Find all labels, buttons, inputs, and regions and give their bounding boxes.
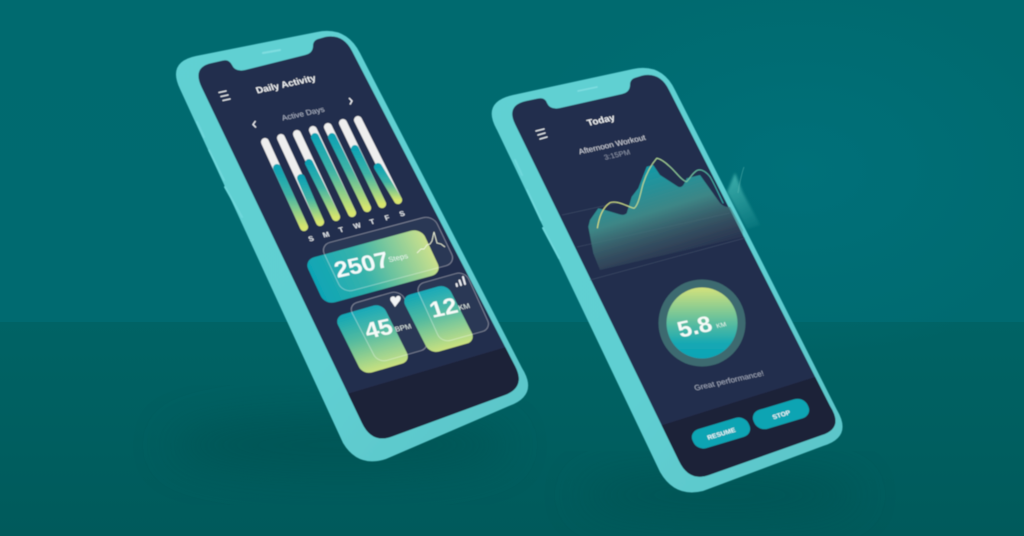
distance card outline (415, 271, 491, 343)
day labels: W (352, 221, 363, 231)
phone 2 bottom band (662, 377, 836, 477)
button: resume: RESUME (706, 427, 737, 442)
steps value: 2507 (331, 248, 393, 283)
button: resume (689, 415, 753, 451)
subtitle: Afternoon Workout: Afternoon Workout (577, 133, 648, 156)
title: Today: Today (585, 113, 617, 129)
heart rate card outline (348, 290, 430, 363)
chart overflow ghost (727, 173, 760, 229)
steps unit: Steps (387, 252, 410, 264)
chart area (588, 165, 743, 270)
title: Daily Activity: Daily Activity (254, 73, 318, 96)
distance card fill (401, 284, 476, 354)
chevron right (349, 98, 352, 104)
button: stop (750, 396, 812, 432)
phone: Daily Activity (176, 31, 530, 461)
phone 2 side buttons (515, 160, 559, 258)
distance value: 12 (427, 294, 461, 323)
heart rate unit: BPM (393, 322, 413, 334)
disc (666, 288, 738, 358)
chart overflow line (738, 167, 744, 193)
day labels: F (383, 213, 391, 222)
phone 1 side buttons (197, 122, 242, 217)
distance unit: KM (715, 321, 728, 330)
distance value: 5.8 (674, 312, 716, 343)
icon: heart (390, 296, 401, 307)
chevron left (253, 121, 256, 128)
phone 1 ground shadow (170, 415, 510, 475)
heart rate card (334, 290, 430, 375)
time: 3:15PM: 3:15PM (603, 148, 632, 162)
day labels: M (321, 230, 331, 239)
day labels: S (307, 234, 315, 243)
background glow (520, 0, 1024, 360)
icon: signal bars (456, 277, 465, 286)
steps card fill (304, 228, 442, 305)
phone 2 ground shadow (580, 473, 860, 517)
label: Active Days: Active Days (280, 105, 326, 122)
day labels: T (368, 217, 376, 226)
area chart (562, 158, 745, 280)
ring (658, 280, 746, 366)
phone: Today (492, 68, 850, 500)
background floor (0, 322, 1024, 536)
steps card (304, 215, 456, 305)
phone 1 shell (176, 31, 528, 461)
distance unit: KM (457, 301, 471, 312)
chart grid lines (562, 203, 745, 280)
day labels: S (398, 209, 406, 218)
distance card (401, 271, 491, 354)
phone 2 speaker (578, 87, 597, 91)
heart rate card fill (334, 303, 411, 375)
bar chart: active days (265, 120, 398, 227)
phone 1 speaker (263, 50, 280, 53)
steps sparkline (417, 232, 445, 253)
day labels: T (337, 225, 345, 234)
phone 2 screen (512, 75, 835, 477)
phone 1 screen (198, 36, 519, 438)
distance ring (658, 280, 746, 366)
day labels (307, 209, 406, 243)
button: stop: STOP (771, 409, 792, 421)
phone 1 menu icon (219, 91, 230, 100)
chart line (597, 158, 723, 228)
phone 2 menu icon (536, 129, 547, 139)
phone 1 bottom band (348, 348, 519, 438)
background wall (0, 0, 1024, 330)
message: Great performance: Great performance! (693, 369, 765, 392)
heart rate value: 45 (362, 315, 396, 344)
steps card outline (320, 215, 456, 293)
phone 2 shell (492, 68, 843, 492)
